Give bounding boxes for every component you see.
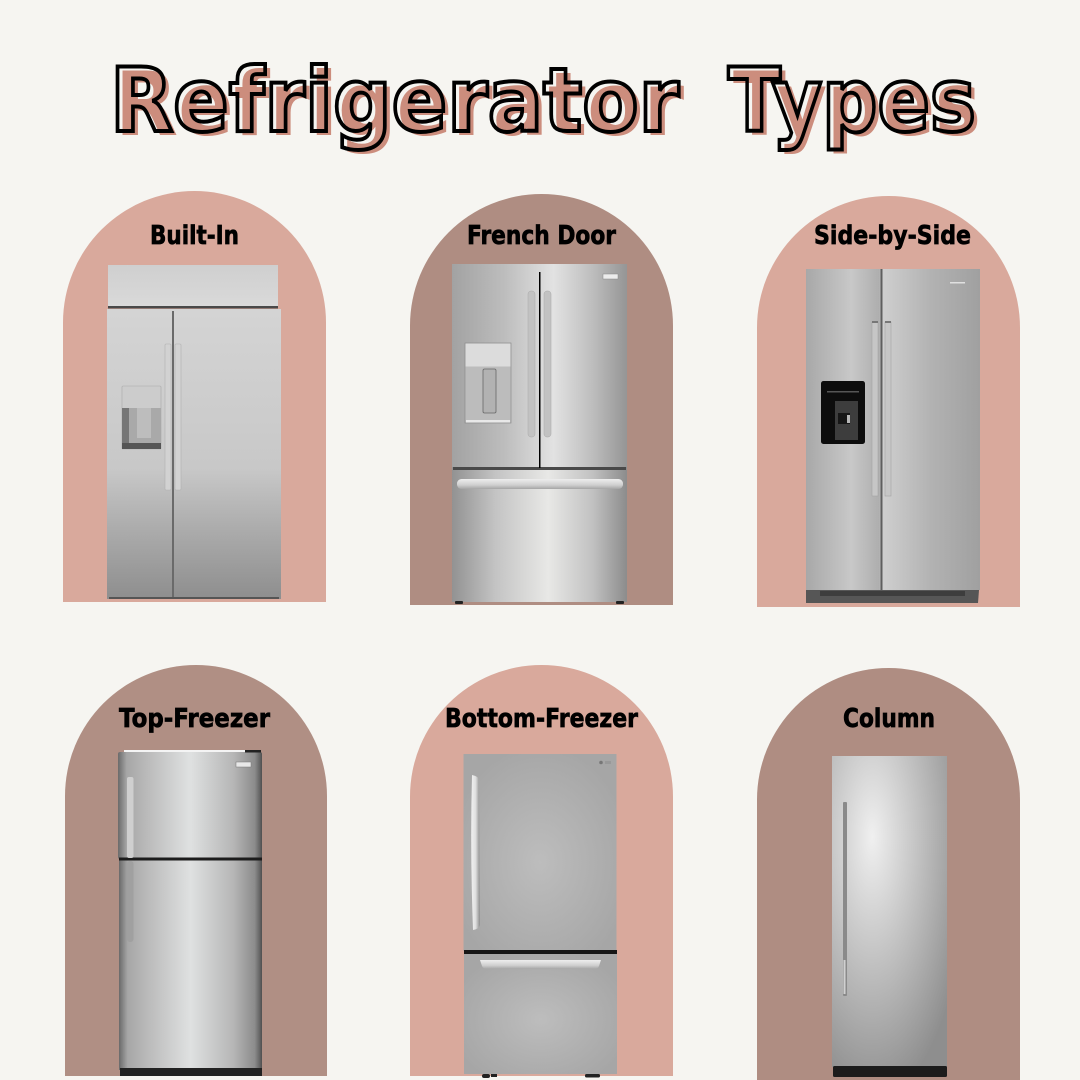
label: Built-In <box>150 221 239 251</box>
label: Bottom-Freezer <box>445 704 638 734</box>
arch background <box>65 665 327 1076</box>
title: Refrigerator <box>115 53 685 156</box>
arch background <box>63 191 326 602</box>
title: Refrigerator <box>110 49 680 152</box>
panel: Bottom-Freezer <box>410 665 673 1078</box>
panel: Top-Freezer <box>65 665 327 1076</box>
arch background <box>757 196 1020 607</box>
label: Top-Freezer <box>119 704 270 734</box>
fridge: top-freezer <box>118 750 262 1076</box>
arch background <box>410 665 673 1076</box>
label: Side-by-Side <box>814 221 971 251</box>
label: French Door <box>467 221 616 251</box>
panel: Column <box>757 668 1020 1080</box>
arch background <box>757 668 1020 1080</box>
panel: Side-by-Side <box>757 196 1020 607</box>
fridge: bottom-freezer <box>464 754 617 1078</box>
title: Types <box>733 53 981 156</box>
fridge: column <box>832 756 947 1077</box>
fridge: french door <box>452 264 627 604</box>
label: Column <box>843 704 935 734</box>
arch background <box>410 194 673 605</box>
panel: Built-In <box>63 191 326 602</box>
fridge: built-in <box>107 265 281 599</box>
panel: French Door <box>410 194 673 605</box>
title: Types <box>728 49 976 152</box>
fridge: side-by-side <box>806 269 980 603</box>
title <box>110 49 981 156</box>
